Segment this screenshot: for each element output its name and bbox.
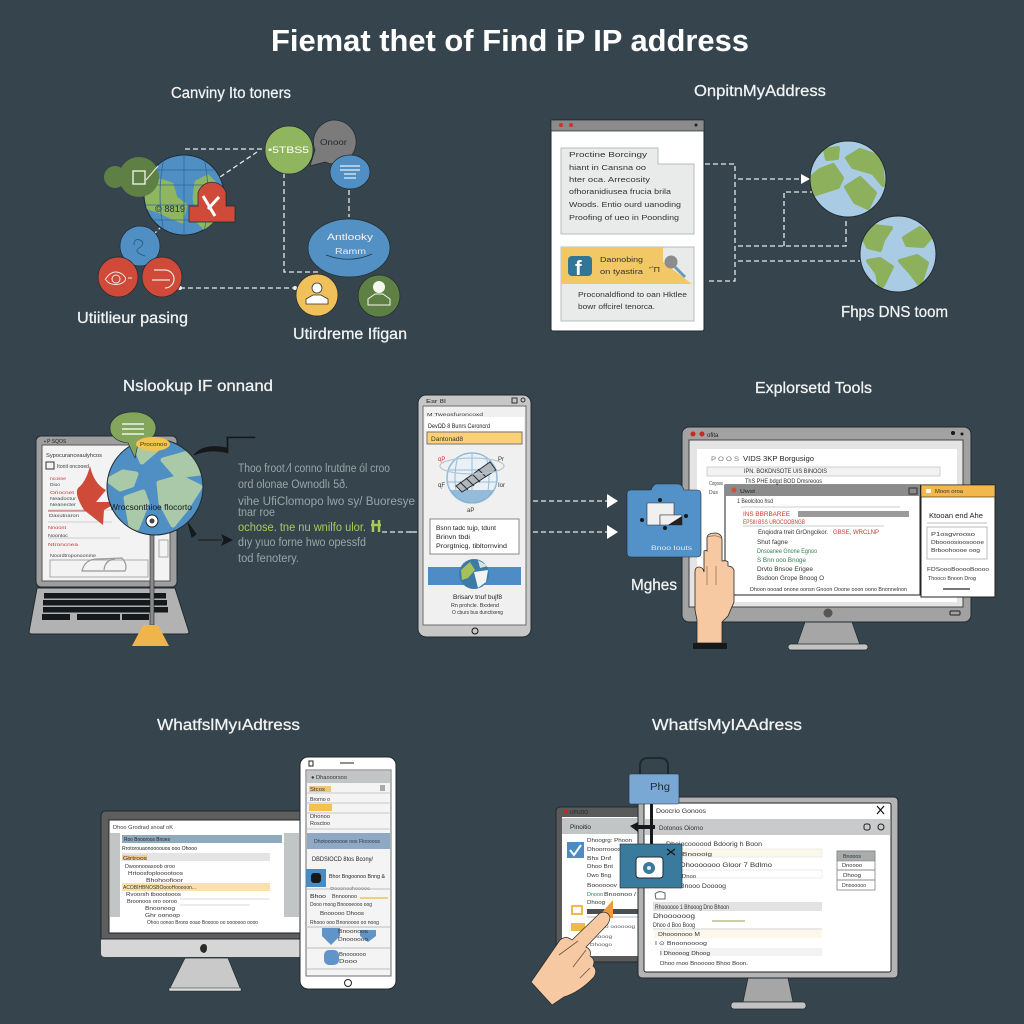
text card: Proofing of ueo in Poonding <box>569 213 679 222</box>
screen text: Noontoc <box>48 533 69 538</box>
icon: globe on stand <box>107 439 203 646</box>
side panel: FDSoooBooooBoooo <box>927 567 989 573</box>
screen text <box>46 453 168 577</box>
yellow tag: Proconoo <box>140 442 167 448</box>
facebook search card: bowr offcirel tenorca. <box>578 302 655 311</box>
form lines: Dhoiocoooood Bdoorig h Boon <box>666 842 762 848</box>
text card: ofhoranidiusea frucia brila <box>569 187 672 196</box>
facebook search card: on tyastira <box>600 267 644 276</box>
blue band with globe <box>428 559 521 589</box>
screen text: Sypocuranceaulyhcos <box>46 453 103 459</box>
panel: network nodes <box>77 85 407 343</box>
icon: blue folder: Bnoo Iouts <box>651 546 692 552</box>
icon: pointing hand <box>693 533 734 649</box>
arrow: back pointer <box>630 822 655 832</box>
tablet: Dhoo Bnt <box>587 864 614 870</box>
phone caption: Brisarv tnuf bujf8 <box>453 595 503 601</box>
yellow tag <box>136 437 170 451</box>
panel: explored tools <box>627 380 995 650</box>
icon: globe lower <box>860 216 936 292</box>
text block: ord olonae Ownodlı 5ð. <box>238 479 348 491</box>
icon: red circle left <box>98 257 138 297</box>
facebook search card <box>561 247 694 321</box>
phone body: Esr 8I <box>426 399 446 405</box>
facebook search card: Daonobing <box>600 255 643 264</box>
text box: Bsnn tadc tujp, tdunt <box>436 525 496 532</box>
monitor text: Hrtoosfoplooootoos <box>128 871 184 877</box>
monitor page text: Cogoss <box>709 481 723 487</box>
phone rows: DBDSIOCD 8tos Bcony/ <box>312 857 373 863</box>
phone rows: Dnoooooo <box>338 937 368 943</box>
monitor: Dotonos Oiorno <box>659 826 704 832</box>
monitor text: Ghr oonoop <box>145 913 180 919</box>
facebook search card: f <box>575 258 582 280</box>
title: Fiemat thet of Find iP IP address <box>271 23 749 58</box>
screen text: Oriocnet <box>50 490 75 495</box>
node: green circle <box>265 126 313 174</box>
arrows to tools <box>410 494 618 539</box>
side panel: P1osgvrooso <box>931 532 975 538</box>
text block <box>238 463 415 565</box>
side table: Bnooos <box>843 854 862 860</box>
tablet: Dhoogo <box>590 942 613 947</box>
phone caption: O cburs bus dunctixeng <box>452 610 503 616</box>
node: small blue ellipse <box>330 155 370 189</box>
side panel: Brboohoooe oog <box>931 548 980 554</box>
panel: WhatsMyAddress desktop and phone <box>101 717 396 991</box>
form lines: Dhooonooo M <box>658 932 700 938</box>
panel: WhatsMyAddress lock and browser <box>531 717 898 1009</box>
result window: Drvto Bnsoe Erigee <box>757 567 814 573</box>
result window: Uwst <box>740 489 756 495</box>
node: large blue ellipse: Antlooky <box>327 232 374 242</box>
text block: tnar roe <box>238 507 275 519</box>
wire globe: ᶐF <box>438 483 445 489</box>
form lines: Bnooo Doooog <box>680 884 726 890</box>
panel: nslookup laptop <box>29 378 417 646</box>
monitor page text: P O O S <box>711 457 739 463</box>
monitor text: Gtrtroos <box>123 856 148 862</box>
side table: Dnoooo <box>842 863 862 869</box>
result window: Enqiodra treit GrOngcikor. <box>758 530 828 536</box>
icon: green mark <box>371 520 381 532</box>
phone rows: Bnnoonoo <box>332 894 357 900</box>
icon: green speech bubble <box>110 412 156 458</box>
result window: 1 Beolcitoo hsd <box>737 499 773 505</box>
screen text: Neanecter <box>50 502 77 507</box>
monitor text: Bhohoofioor <box>146 878 183 884</box>
monitor: ofita <box>707 433 719 439</box>
phone header rows: DevΩD 8 Bunrs Ceroncrd <box>428 423 490 430</box>
result window <box>725 485 920 595</box>
heading: Nslookup IF onnand: Nslookup IF onnand <box>123 378 273 395</box>
laptop: ▪ P SQOS <box>44 439 67 445</box>
result window: S Bnn ooo Bnoge <box>757 558 807 564</box>
node: gray bubble: Onoor <box>320 138 347 147</box>
facebook search card: Proconaldfiond to oan Hktlee <box>578 290 687 299</box>
phone rows: Dooo rnoog Bnoooeooo oog <box>310 902 372 908</box>
form lines: Dhoo d Boo Boog <box>653 923 695 929</box>
side panel <box>921 485 995 597</box>
text block: Thoo froot ⁄l conno lrutdne ól croo <box>238 463 390 475</box>
icon: globe upper <box>808 141 886 217</box>
panel: browser to globes <box>551 83 948 331</box>
phone body <box>418 395 531 637</box>
keyboard <box>42 593 168 620</box>
wire globe: aP <box>467 508 474 514</box>
screen text: Nnoont <box>48 525 67 530</box>
icon: globe on stand: Wrocsonthioe flocorto <box>110 503 193 512</box>
text block: tod fenotery. <box>238 553 299 565</box>
form lines: Dhoooooog <box>653 914 695 920</box>
phone rows: Rhooo ooo Bnonoooo oo noog <box>310 920 379 926</box>
screen text: Noordtroponoonme <box>50 553 97 558</box>
wire globe <box>438 453 505 514</box>
phone rows: Brorno o <box>310 797 330 803</box>
text card: hiant in Cansna oo <box>569 163 646 172</box>
monitor: Doocrio Gonoos <box>656 809 706 815</box>
screen text: Itonit oncooed <box>57 464 89 470</box>
panel: phone <box>410 395 618 637</box>
wire globe: Pr <box>498 457 504 463</box>
phone rows: Bnoooooo <box>339 952 366 958</box>
text card: Woods. Entio ourd uanoding <box>569 200 681 209</box>
phone rows: Oooonoohooooo <box>330 886 371 891</box>
side table: Dnoooooo <box>842 883 866 889</box>
heading: Canviny Ito toners: Canviny Ito toners <box>171 85 291 102</box>
text box <box>430 519 519 554</box>
arrow: curved black <box>194 437 255 455</box>
screen text: Dioo <box>50 482 61 487</box>
icon: green user <box>358 275 400 317</box>
phone rows: Stcos <box>310 787 326 793</box>
result window: Dhoon oooad onone oonsn Gnoon Ooone ooon oono Bnonnelnon <box>750 587 907 593</box>
wire globe: ᶐP <box>438 457 445 463</box>
form lines: I Dhoooog Dhoog <box>660 951 710 957</box>
heading: WhatsMyAddress right: WhatfsMyIAAdress <box>652 717 802 734</box>
text box: Prorgtnicg, tibltornvind <box>436 543 507 550</box>
phone rows: Rosctoo <box>310 821 330 827</box>
label: Utiitlieur pasing: Utiitlieur pasing <box>77 310 188 327</box>
text block: vihe UfiClomopo lwo sy/ Buoresye <box>238 496 415 508</box>
node: large blue ellipse <box>308 219 390 277</box>
tablet: Dhoog <box>587 900 605 906</box>
icon: pointing hand with orange cursor <box>531 900 613 1005</box>
label: Mghes: Mghes <box>631 577 677 594</box>
phone header rows: M Tweosfuroncoxd <box>427 412 484 417</box>
text card <box>561 148 694 234</box>
tablet: Pinoitio <box>570 825 592 831</box>
label: Fhps DNS toom: Fhps DNS toom <box>841 304 948 321</box>
phone rows: Bnoonoos <box>338 929 369 935</box>
monitor text: Ohoo oonoo Brono ooao Booooo oo ooooooo oooo <box>147 920 258 926</box>
result window: INS BBRBAREE <box>743 511 791 518</box>
node: gray bubble <box>310 120 356 166</box>
node: green circle: •5TBS5 <box>268 145 309 155</box>
facebook search card: '΅Π <box>649 265 660 274</box>
phone rows: Bnooooo Dhoos <box>320 911 365 917</box>
phone rows: Dhotooonoooe oos Flooooos <box>314 839 380 845</box>
monitor page text: IPN. BOKDNSOTE UIS BINOOIS <box>744 469 827 475</box>
tablet: Dhoorrooos <box>587 847 621 853</box>
text block: ochose. tne nu wnilfo ulor. <box>238 522 366 534</box>
icon: yellow user <box>296 274 338 316</box>
phone caption: Rn prohcle. Bxxtend <box>451 603 499 609</box>
side table <box>837 851 875 890</box>
tablet: Boooooov <box>587 883 617 889</box>
tablet: Dhoogrg: Phoon <box>587 838 632 844</box>
monitor page text: ThS PHE bdgd BOD Dmsreoos <box>745 479 822 485</box>
phone caption <box>451 595 503 616</box>
phone <box>300 757 396 989</box>
tablet: Dwo Bng <box>587 873 611 879</box>
screen text: Neadoctur <box>50 496 77 501</box>
phone rows <box>306 785 390 969</box>
icon: padlock tag: Phg <box>650 782 670 793</box>
side panel: Thooco Bnoon Drog <box>928 576 976 582</box>
icon: blue folder <box>627 484 701 557</box>
form lines: Dhooooooo Gloor 7 Bdlmo <box>680 863 773 869</box>
arrow <box>801 174 810 184</box>
form lines: Dhoo rnoo Bnooooo Bhoo Boon. <box>660 961 749 967</box>
laptop <box>29 436 189 634</box>
icon: blue circle node <box>120 226 160 266</box>
form lines: Rhoooooo 1 Bhooog Dno Bhoon <box>655 905 729 911</box>
phone: ● Dhaooorsoo <box>311 775 347 781</box>
icon: camera box <box>620 844 682 888</box>
monitor text: ACOBIHBNOSBOoooHooooon... <box>123 885 196 891</box>
result window: Dnsoanee Gnone Egnoo <box>757 549 818 555</box>
screen text: Ntroncnea <box>48 542 79 547</box>
side panel: Moon oroa <box>935 489 964 495</box>
monitor text: Rrotorouaonoooouos ooo Ohooo <box>122 846 197 852</box>
dashed connectors <box>705 164 860 281</box>
label: Utirdreme Ifigan: Utirdreme Ifigan <box>293 326 407 343</box>
monitor text: Rvoorsh tboootooos <box>126 892 182 898</box>
tablet <box>556 807 646 962</box>
icon: red lock <box>189 182 235 222</box>
screen text: ncosne <box>50 476 67 481</box>
phone rows: Bhoo <box>310 894 326 900</box>
phone header rows <box>425 412 524 444</box>
icon: red flame <box>77 466 118 525</box>
text card: Proctine Borcingy <box>569 150 647 159</box>
monitor <box>638 797 898 1009</box>
form lines: Bnoooig <box>682 852 712 858</box>
tablet: UPLIOO <box>570 810 588 816</box>
heading: Explorsetd Tools: Explorsetd Tools <box>755 380 872 397</box>
icon: globe: © 8819 <box>155 204 185 214</box>
monitor page text: VIDS 3KP Borgusigo <box>743 456 814 463</box>
heading: WhatsMyAddress left: WhatfslMyıAdtress <box>157 717 300 734</box>
icon: globe <box>144 155 225 235</box>
monitor text: Broonoos oro ooroo <box>127 899 177 905</box>
monitor page text: Dus <box>709 490 718 496</box>
tablet: Bnoonoo / <box>604 892 637 898</box>
tablet: Bhs Dnf <box>587 856 612 862</box>
monitor <box>101 811 307 991</box>
monitor text: Dwoonooasoob oroo <box>125 864 175 870</box>
browser window <box>551 120 704 331</box>
screen text: Daxutnaron <box>49 513 80 518</box>
phone rows: Dooo <box>339 959 357 965</box>
dashed connector <box>382 531 417 533</box>
tablet: Dnooo <box>587 892 603 898</box>
text box: Brinvn tbdi <box>436 534 470 541</box>
result window: Shut fagne <box>757 540 789 546</box>
wire globe: Ior <box>498 483 505 489</box>
icon: green speech node <box>104 157 159 197</box>
side panel: Ktooan end Ahe <box>929 513 983 520</box>
monitor page text <box>707 456 940 496</box>
form lines: I ⊙ Bnoonoooog <box>655 941 707 947</box>
arrow: small black <box>188 523 232 545</box>
monitor <box>682 427 971 650</box>
dashed connectors <box>153 149 349 290</box>
phone rows: Bhor Bngoonoo Bnng & <box>329 874 385 880</box>
monitor text: Bnoonoog <box>145 906 175 912</box>
tablet: Dhooo oooooog <box>590 924 636 929</box>
monitor text: Dhoo Grodrad snoaf oK <box>113 825 173 831</box>
side panel: Dboooosioosoooe <box>931 540 984 546</box>
monitor text: Roo Bnooroos Bnoes <box>124 837 170 843</box>
heading: OnpitnMyAddress: OnpitnMyAddress <box>694 83 826 100</box>
monitor text <box>113 825 282 926</box>
tablet: Bnooog <box>590 934 613 939</box>
phone header rows: Dantonad8 <box>431 436 463 443</box>
icon: padlock tag <box>629 758 679 844</box>
result window: EPS8I BSS UROCOOBNGB <box>743 520 805 526</box>
result window: GBSE, WRCLNP <box>833 529 879 536</box>
form lines <box>653 842 822 967</box>
text block: dıy yıuo forne hwo opessfd <box>238 537 366 549</box>
side table: Dhoog <box>843 873 861 879</box>
result window: Bsdoon Grope Bnoog O <box>757 576 824 582</box>
text card: hter oca. Arrecosity <box>569 175 650 184</box>
node: large blue ellipse: Ramm <box>335 247 366 256</box>
icon: red circle right <box>142 257 182 297</box>
phone rows: Dhonoo <box>310 814 330 820</box>
form lines: Dnoo <box>682 874 696 880</box>
